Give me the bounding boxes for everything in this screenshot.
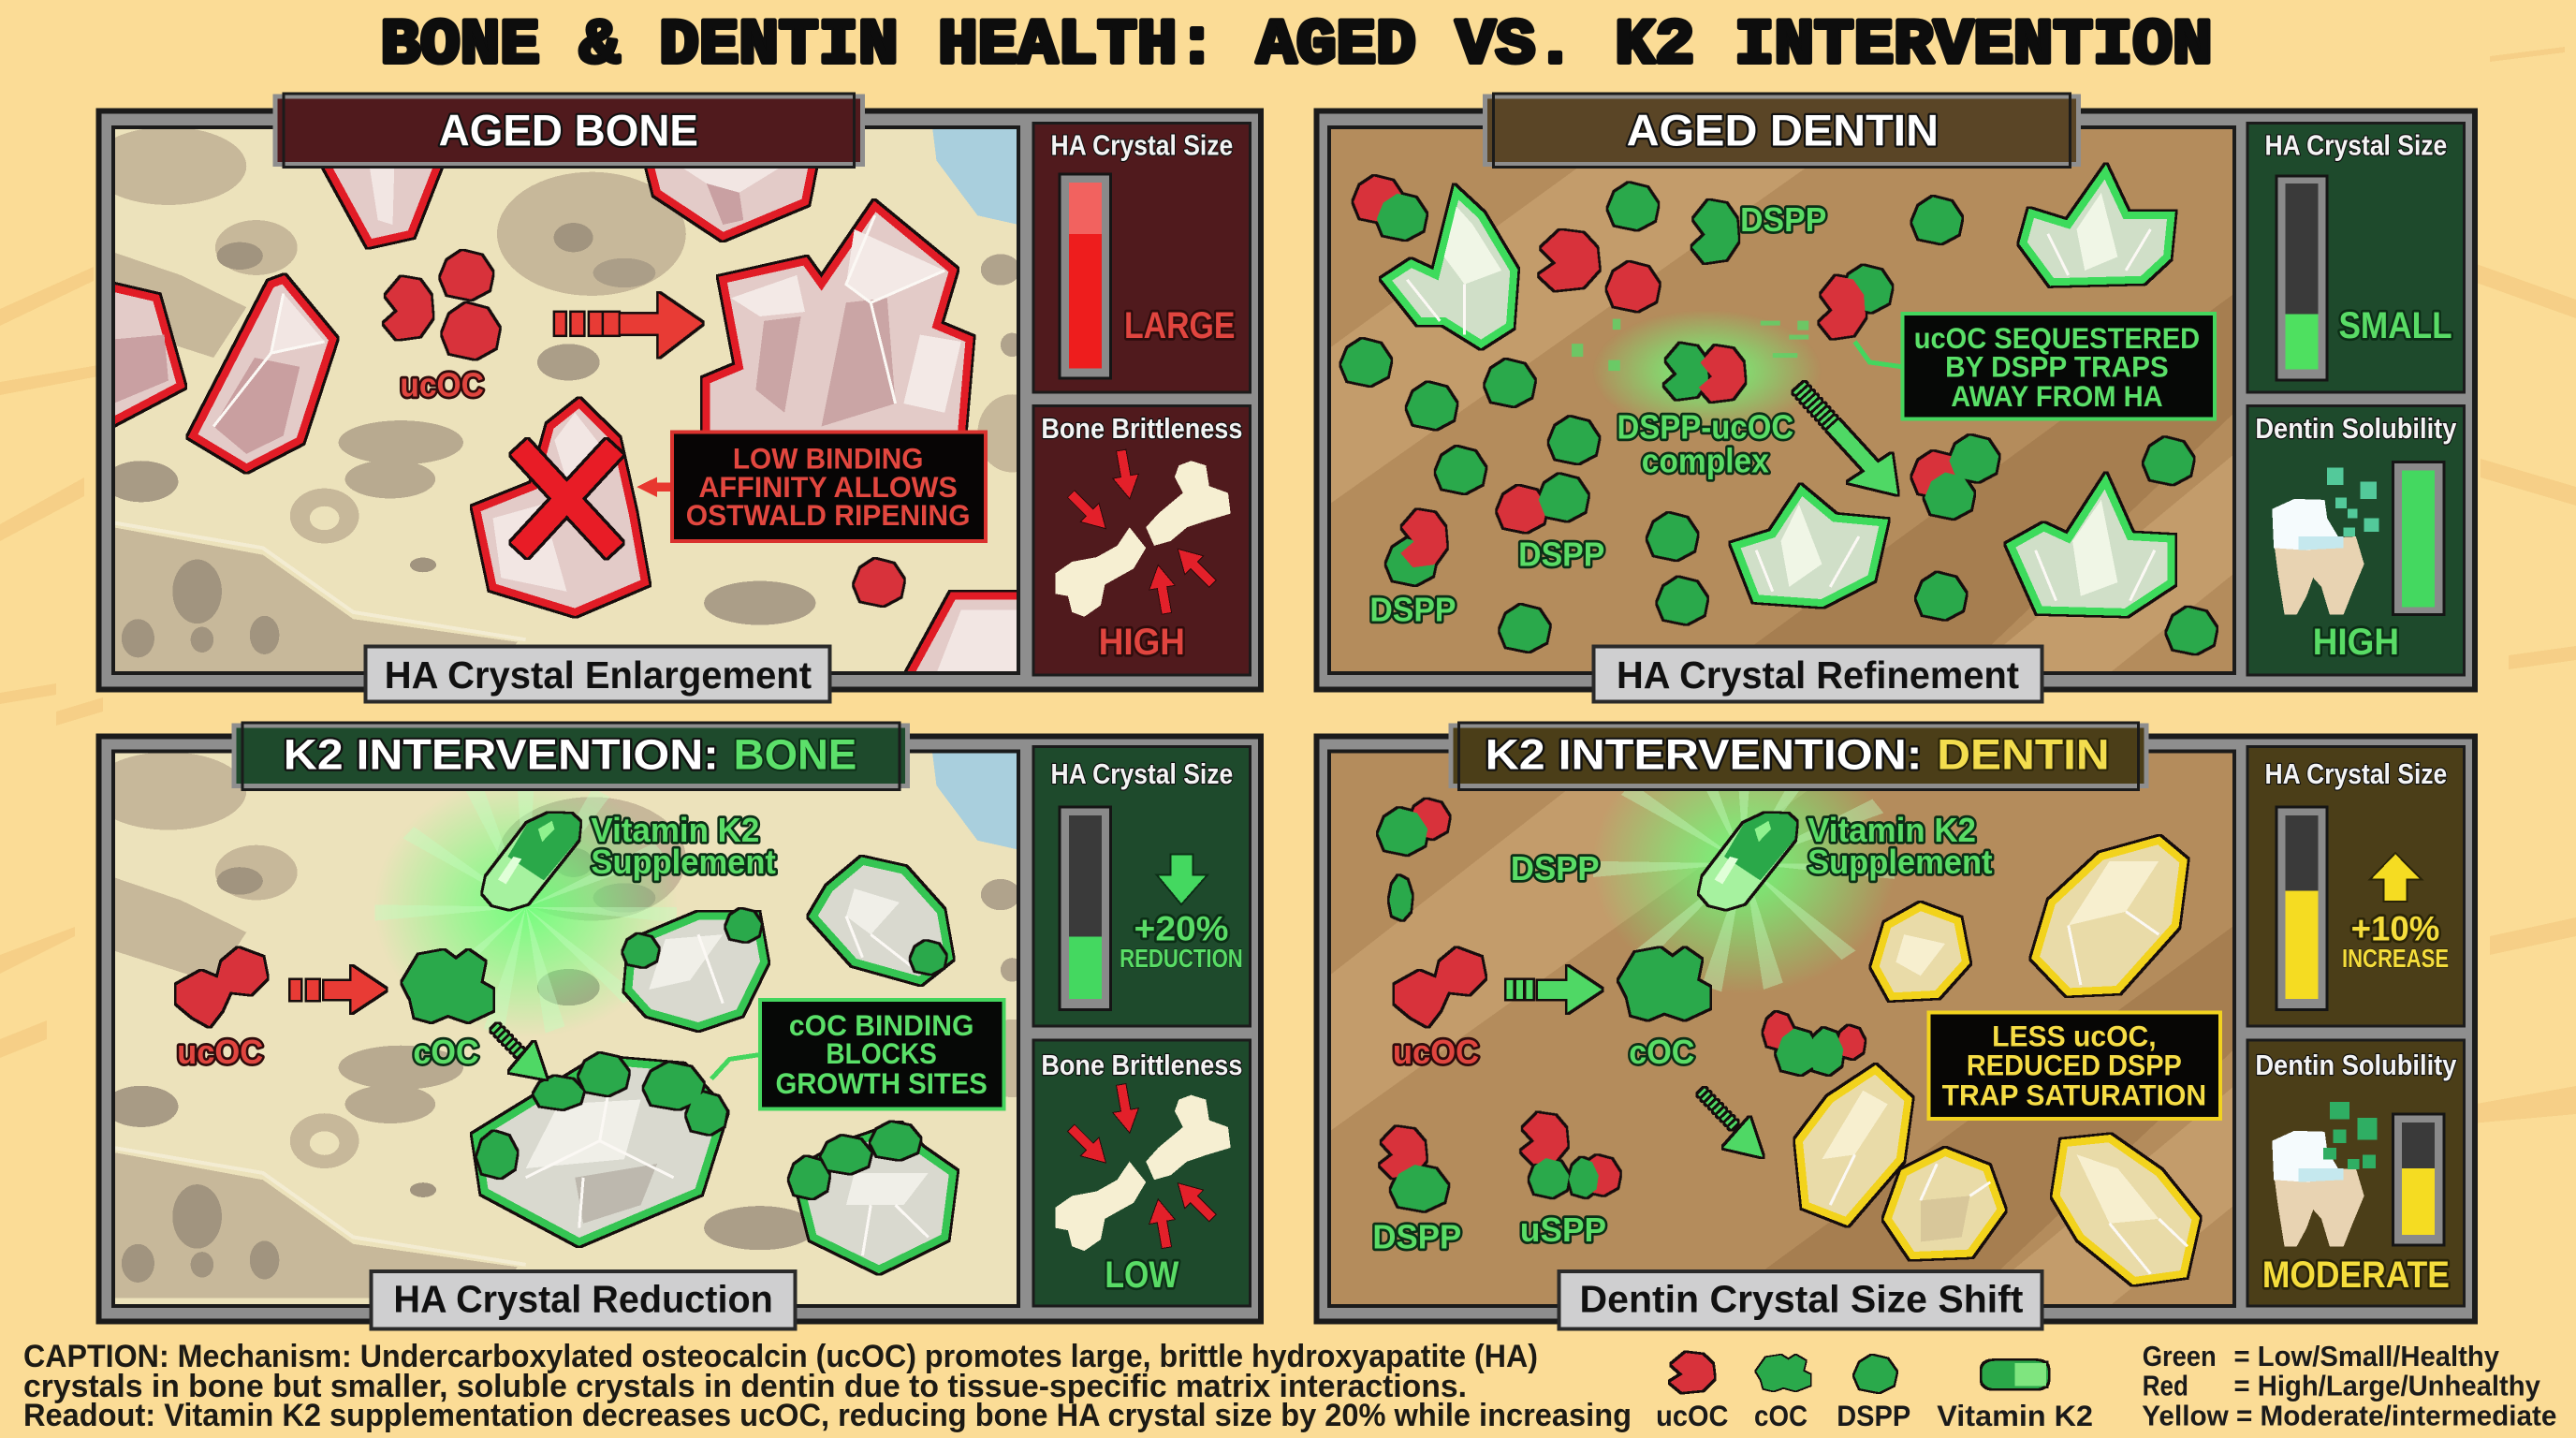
banner: K2 intervention bone: BONE [734,731,856,778]
yellow HA crystals [1799,841,2196,1281]
legend: molecule icons: cOC [1754,1400,1808,1432]
banner: K2 intervention dentin: K2 INTERVENTION: [1486,731,1923,778]
callout: Ostwald ripening: LOW BINDING [733,442,923,475]
panel: aged dentin [1317,94,2475,701]
label: HA crystal refinement [1593,647,2042,701]
side gauge: HA crystal size reduction: HA Crystal Size [1050,758,1233,790]
ucOC to cOC conversion [177,948,267,1026]
callout: less ucOC [1929,1012,2220,1119]
panel: aged bone [91,94,1261,701]
red X mark [520,448,614,550]
DSPP-ucOC complex with glow [1572,310,1822,433]
labels: molecules: uSPP [1520,1211,1606,1249]
legend: colour key [2142,1341,2556,1431]
cOC binding on crystals [477,909,945,1198]
legend: molecule icons [1656,1353,2093,1432]
DSPP labels: DSPP [1740,201,1826,239]
callout: Ostwald ripening: OSTWALD RIPENING [686,499,970,532]
arrow: to refined crystals [1799,388,1897,494]
green tinted crystals [1386,172,2171,612]
DSPP labels [1369,201,1826,629]
side gauge: HA crystal size reduction [1033,746,1251,1026]
labels: vitamin K2 supplement [591,812,776,881]
side gauge: bone brittleness low [1033,1040,1251,1306]
labels: vitamin K2 supplement [1808,812,1993,881]
caption: Readout: Vitamin K2 supplementation decreases ucOC, reducing bone HA crystal size by 20% while increasing [23,1398,1632,1433]
callout: less ucOC: LESS ucOC, [1992,1020,2157,1053]
panel: K2 intervention dentin [1317,723,2556,1432]
dentin illustration [1329,733,2234,1306]
label: dentin crystal size shift: Dentin Crystal Size Shift [1580,1278,2024,1321]
side gauge: HA crystal size increase [2247,746,2465,1026]
label: HA crystal enlargement [366,647,829,701]
callout: ucOC sequestered [1855,314,2215,419]
bone illustration [91,751,1046,1306]
side gauge: dentin solubility high: HIGH [2313,621,2399,663]
callout: ucOC sequestered: BY DSPP TRAPS [1945,350,2169,383]
banner: K2 intervention dentin [1451,723,2146,789]
side gauge: bone brittleness high [1033,405,1251,675]
side gauge: bone brittleness high: Bone Brittleness [1041,413,1242,445]
vitamin K2 pill [483,814,580,909]
side gauge: bone brittleness high: HIGH [1099,621,1185,663]
label: dentin crystal size shift [1559,1271,2042,1328]
caption: CAPTION: Mechanism: Undercarboxylated osteocalcin (ucOC) promotes large, brittle hydroxyapatite (HA) [23,1339,1538,1374]
arrow: ucOC to large crystal [555,293,702,357]
side gauge: HA crystal size small: SMALL [2338,304,2452,346]
labels: molecules: DSPP [1511,850,1600,888]
coated HA crystals [476,861,953,1269]
callout: less ucOC: REDUCED DSPP [1967,1049,2182,1081]
labels: molecules [1372,850,1694,1256]
side gauge: HA crystal size increase: +10% [2351,910,2439,948]
side gauge: HA crystal size large [1033,123,1251,392]
legend: molecule icons: DSPP [1837,1400,1910,1432]
labels: molecules: DSPP [1372,1218,1461,1256]
banner: K2 intervention dentin: DENTIN [1937,731,2110,778]
title: BONE & DENTIN HEALTH: AGED VS. K2 INTERVENTION [380,9,2213,82]
vitamin K2 glow [1592,733,1895,994]
callout: ucOC sequestered: AWAY FROM HA [1951,380,2163,413]
label: cOC: cOC [413,1034,479,1071]
side gauge: HA crystal size increase: INCREASE [2342,945,2449,973]
callout: cOC binding: cOC BINDING [789,1009,973,1042]
label: HA crystal enlargement: HA Crystal Enlargement [385,653,812,697]
DSPP labels: DSPP [1369,591,1456,629]
labels: vitamin K2 supplement: Supplement [1808,843,1993,881]
banner: K2 intervention bone [234,723,908,789]
legend: molecule icons: Vitamin K2 [1937,1400,2093,1432]
side gauge: dentin solubility high [2247,405,2465,675]
dentin illustration [1329,127,2234,673]
side gauge: dentin solubility moderate [2247,1040,2465,1306]
callout: ucOC sequestered: ucOC SEQUESTERED [1914,322,2200,355]
banner: aged bone: AGED BONE [439,106,698,155]
banner: aged dentin: AGED DENTIN [1627,106,1939,155]
side gauge: HA crystal size large: LARGE [1124,304,1235,346]
banner: aged bone [275,94,862,167]
callout: cOC binding: GROWTH SITES [775,1067,988,1100]
side gauge: HA crystal size reduction: +20% [1134,910,1228,948]
label: ucOC: ucOC [400,366,484,404]
side gauge: bone brittleness low: LOW [1105,1254,1178,1296]
legend: colour key: Red [2143,1371,2188,1402]
label: ucOC: ucOC [177,1034,263,1071]
molecules: ucOC [384,251,903,606]
callout: less ucOC: TRAP SATURATION [1942,1078,2206,1111]
side gauge: HA crystal size small [2247,123,2465,392]
labels: vitamin K2 supplement: Vitamin K2 [1808,812,1976,849]
vitamin K2 glow [373,776,678,1037]
label: HA crystal reduction: HA Crystal Reduction [393,1278,773,1321]
labels: molecules: cOC [1629,1034,1694,1071]
caption: crystals in bone but smaller, soluble crystals in dentin due to tissue-specific matrix interactions. [23,1369,1467,1404]
labels: vitamin K2 supplement: Supplement [591,843,776,881]
side gauge: HA crystal size large: HA Crystal Size [1050,130,1233,162]
callout: cOC binding: BLOCKS [826,1037,937,1070]
labels: vitamin K2 supplement: Vitamin K2 [591,812,759,849]
legend: colour key: Green [2143,1341,2217,1372]
enlarged HA crystals [107,160,1027,679]
vitamin K2 pill [1700,814,1796,909]
bone illustration [91,127,1046,679]
callout: Ostwald ripening [637,432,986,541]
panel: K2 intervention bone [91,723,1261,1328]
side gauge: bone brittleness low: Bone Brittleness [1041,1049,1242,1081]
labels: molecules: ucOC [1393,1034,1479,1071]
DSPP labels: DSPP [1518,536,1604,574]
banner: K2 intervention bone: K2 INTERVENTION: [284,731,719,778]
banner: aged dentin [1486,94,2078,167]
panel: K2 intervention bone: REDUCTION [1120,945,1243,973]
callout: Ostwald ripening: AFFINITY ALLOWS [698,471,958,504]
ucOC to cOC conversion [1395,948,1486,1026]
molecules [1379,800,1865,1211]
DSPP labels: complex [1642,442,1769,480]
caption [23,1339,1632,1433]
molecules: DSPP and ucOC scattered [1341,177,2217,653]
legend: molecule icons: ucOC [1656,1400,1728,1432]
DSPP labels: DSPP-ucOC [1617,408,1793,447]
callout: cOC binding [711,1000,1003,1108]
label: HA crystal reduction [372,1271,796,1328]
label: HA crystal refinement: HA Crystal Refinement [1617,653,2019,697]
